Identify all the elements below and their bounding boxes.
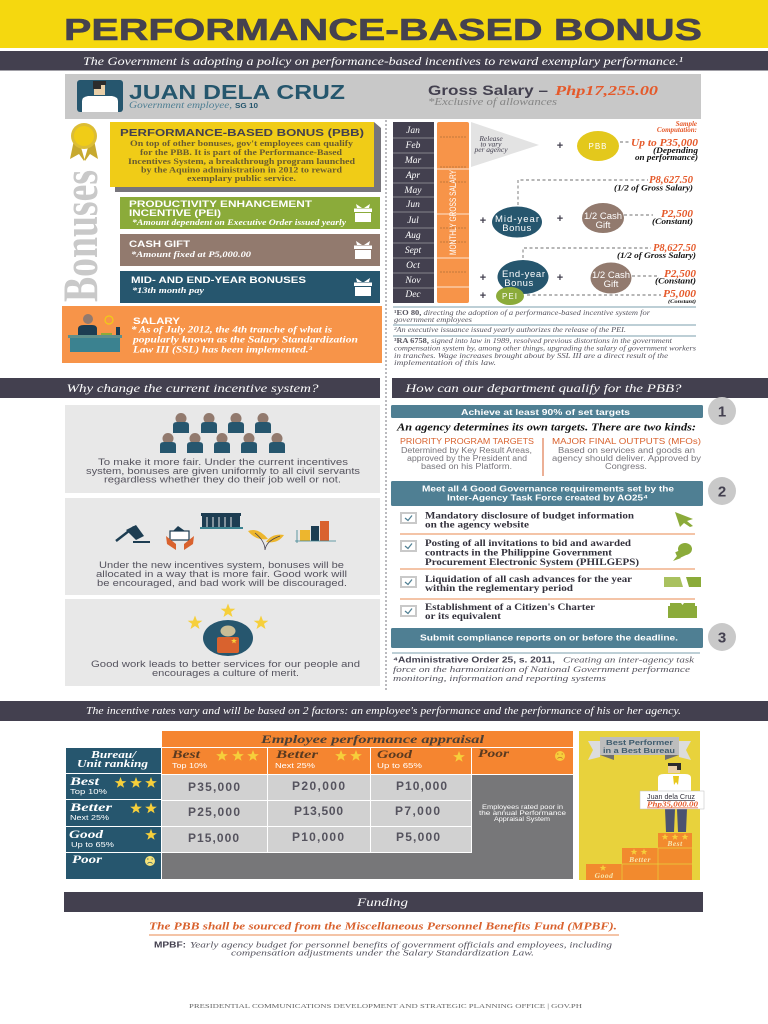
step 3 bar [391,628,703,648]
vertical heading: Bonuses: Bonuses [52,170,108,302]
icon: hands holding ballot [166,526,194,550]
panel: good work: Good work leads to better services for our people and [91,659,360,669]
month column: Jan [406,126,420,136]
ribbon banner: in a Best Bureau [603,746,676,755]
panel: uniform bonuses: regardless whether they do their job well or not. [104,474,341,484]
end-year bonus circle: Bonus [504,278,534,289]
month column: May [404,186,422,196]
major final outputs [552,436,701,471]
icon: gift [354,204,372,222]
sample computation amounts: Sample [676,120,697,128]
step number 1: 1 [718,404,726,420]
icon: group of employees [160,413,285,453]
footnotes: laws and issuances: ¹EO 80, directing the adoption of a performance-based incentive system for [394,309,650,317]
MPBF definition: compensation adjustments under the Salary Standardization Law. [231,948,534,958]
row headers: Better [69,800,112,814]
panel body text: Incentives System, a breakthrough program launched [128,156,355,166]
row headers: Poor [72,852,102,866]
sample computation amounts: Up to P35,000 [631,137,699,149]
major final outputs: MAJOR FINAL OUTPUTS (MFOs) [552,436,701,446]
figure: employee on podium [658,763,691,832]
release triangle: per agency [473,145,508,154]
plus signs: + [557,213,563,225]
step 1 bar [391,405,703,418]
gross salary label: Gross Salary – [428,83,549,98]
amount cells: P35,000 [188,780,240,794]
month column: Dec [404,290,421,300]
amount cells: P15,000 [188,831,239,845]
table heading: Employee performance appraisal [260,732,485,746]
mid-year bonus circle [492,206,542,238]
checklist: citizen's charter: or its equivalent [425,611,501,621]
plus signs: + [557,140,563,152]
checklist: PhilGEPS posting: Procurement Electronic System (PHILGEPS) [425,557,639,567]
month column: Jul [407,216,419,226]
checklist: cash advances [400,574,701,593]
sample computation amounts: (Depending [653,145,699,155]
section bar: incentive rates [0,701,768,721]
panel body text [128,138,355,183]
icon: sad face [555,751,565,761]
icon: gift [354,278,372,296]
section bar: why change [0,378,380,398]
column header: good: Good [377,747,413,761]
footnote: administrative order [392,653,700,683]
section bar: funding: Funding [356,897,408,909]
panel body text: by the Aquino administration in 2012 to reward [141,164,342,174]
mid-year cash gift circle [582,203,624,233]
amount cells [162,775,471,852]
row headers: Bureau/ [90,750,137,761]
mid-year cash gift circle: 1/2 Cash [584,211,622,222]
row headers: Next 25% [70,813,109,822]
plus signs: + [480,272,486,284]
podium steps: Good [595,871,613,880]
plus signs: + [480,215,486,227]
plus signs [480,140,563,302]
month column: Jun [406,200,420,210]
row headers [66,748,161,879]
checklist: budget disclosure [400,510,693,530]
panel: mid- and end-year bonuses [120,271,380,303]
icon: bar chart [295,521,336,543]
row headers: Unit ranking [77,759,148,770]
icon: stars and merit badge [188,604,268,656]
podium steps: Best [666,839,683,848]
month column [393,122,434,303]
panel: salary: * As of July 2012, the 4th tranche of what is [131,324,333,334]
name tag: Php35,000.00 [647,800,699,808]
step 2 bar [391,481,703,506]
checklist: PhilGEPS posting [400,538,692,567]
amount cells: P7,000 [395,804,440,818]
section bar: how to qualify: How can our department qualify for the PBB? [404,381,682,395]
column header: good: Up to 65% [377,761,422,770]
title banner: PERFORMANCE-BASED BONUS [64,12,702,47]
column header: better: Next 25% [275,761,315,770]
column header: better: Better [275,747,318,761]
footnotes: laws and issuances: ²An executive issuance issued yearly authorizes the release of the PEI. [394,326,626,334]
panel: productivity enhancement incentive: PRODUCTIVITY ENHANCEMENT [129,199,312,210]
section bar: why change: Why change the current incentive system? [66,381,318,395]
end-year bonus circle: End-year [502,269,545,280]
icon: cash stacks [664,577,701,587]
priority program targets: approved by the President and [407,454,527,463]
month column: Nov [404,276,421,286]
sample computation amounts: (Constant) [652,216,693,226]
poor rating cells: Employees rated poor in [482,804,563,811]
sample computation amounts: on performance) [635,152,698,162]
employee role: Government employee, [129,101,232,111]
title banner [0,0,768,48]
panel: salary [62,306,382,363]
end-year cash gift circle [590,262,632,294]
panel: productivity enhancement incentive: *Amount dependent on Executive Order issued yearly [132,217,346,227]
ribbon banner [588,737,691,760]
panel: salary: popularly known as the Salary Standardization [132,334,358,344]
mid-year cash gift circle: Gift [596,220,611,231]
footnote: administrative order: ⁴Administrative Order 25, s. 2011, [393,656,555,664]
footnotes: laws and issuances: government employees [394,316,472,324]
panel heading: PERFORMANCE-BASED BONUS (PBB) [120,127,364,139]
column header: best [162,747,267,774]
sample computation amounts: P2,500 [664,268,696,280]
footnotes: laws and issuances [393,307,696,367]
icon: gift [354,241,372,259]
panel: new incentives system: Under the new incentives system, bonuses will be [99,560,344,570]
panel: cash gift: CASH GIFT [129,239,190,250]
plus signs: + [557,272,563,284]
column header: poor: Poor [478,746,509,760]
step 3 bar: Submit compliance reports on or before the deadline. [420,632,678,642]
icon: employee at desk [68,314,122,352]
month column: Aug [404,231,421,241]
PBB circle: PBB [588,142,608,151]
mid-year bonus circle: Bonus [502,223,532,234]
section bar: funding [64,892,703,912]
priority program targets: Determined by Key Result Areas, [401,446,532,455]
sample computation amounts [614,120,699,305]
checklist: citizen's charter: Establishment of a Citizen's Charter [425,602,595,612]
column header: best: Top 10% [172,761,207,770]
podium steps: Better [628,855,651,864]
major final outputs: Congress. [605,462,647,471]
row headers: Top 10% [70,787,107,796]
amount cells: P13,500 [294,804,343,818]
sample computation amounts: P8,627.50 [653,242,696,254]
column header: best: Best [171,747,201,761]
section bar: how to qualify [392,378,768,398]
PEI circle [496,287,524,305]
icon: government building [200,513,243,529]
PBB circle [577,131,619,161]
sample computation amounts: P2,500 [661,208,693,220]
panel: uniform bonuses: system, bonuses are given uniformly to all civil servants [86,466,361,476]
employee profile header [65,74,701,119]
amount cells: P25,000 [188,805,240,819]
row headers: Good [69,827,104,841]
checklist: citizen's charter [400,602,697,621]
icon: cursor [675,512,693,527]
checklist: cash advances: within the reglementary period [425,583,573,593]
panel body text: On top of other bonuses, gov't employees can qualify [130,138,354,148]
icon: sad face [145,856,155,866]
section bar: incentive rates: The incentive rates vary and will be based on 2 factors: an employee's performance and the performance of his or her agency. [86,706,681,717]
mid-year bonus circle: Mid-year [495,214,539,225]
amount cells: P10,000 [396,779,447,793]
panel: new incentives system [65,498,380,595]
column header: good [371,747,471,774]
funding statement: The PBB shall be sourced from the Miscellaneous Personnel Benefits Fund (MPBF). [149,922,617,932]
poor rating cells [162,775,573,879]
footnote: administrative order: force on the harmonization of National Government performance [393,665,691,674]
panel: productivity enhancement incentive [120,197,380,229]
panel: new incentives system: be encouraged, and bad work will be discouraged. [97,578,347,588]
dashed connectors [518,142,661,295]
MPBF definition: MPBF: [154,940,186,950]
step number 3 [708,623,736,651]
name tag: Juan dela Cruz [647,794,695,801]
icon: pushpin [673,543,692,561]
footnotes: laws and issuances: in tranches. Wage increases brought about by SSL III are a direct result of the [394,352,668,360]
ribbon banner: Best Performer [606,738,673,747]
major final outputs: agency should deliver. Approved by [552,454,701,463]
priority program targets: PRIORITY PROGRAM TARGETS [400,436,534,446]
monthly gross salary column [437,122,469,303]
poor rating cells: the annual Performance [479,810,566,817]
priority program targets: based on his Platform. [421,462,512,471]
sample computation amounts: Computation: [657,126,697,134]
footnotes: laws and issuances: implementation of this law. [394,359,496,367]
panel: good work: encourages a culture of merit. [152,668,299,678]
step number 3: 3 [718,630,726,646]
icon: medal [70,123,98,161]
employee name: JUAN DELA CRUZ [129,82,345,104]
row headers: Up to 65% [71,840,114,849]
panel body text: for the PBB. It is part of the Performance-Based [140,147,342,157]
sample computation amounts: (Constant) [655,276,696,286]
step number 2: 2 [718,484,726,500]
panel: salary: SALARY [133,316,181,327]
panel: performance-based bonus [110,122,381,192]
incentive rates table [66,731,573,879]
panel: cash gift: *Amount fixed at P5,000.00 [131,249,252,259]
PEI circle: PEI [502,292,518,301]
major final outputs: Based on services and goods an [558,446,695,455]
sample computation amounts: (Constant) [668,298,696,305]
month column: Feb [405,141,421,151]
release triangle: Release [478,134,503,143]
end-year bonus circle [498,260,548,294]
MPBF definition: Yearly agency budget for personnel benefits of government officials and employees, including [190,940,612,950]
amount cells: P10,000 [292,830,344,844]
panel body text: exemplary public service. [187,173,296,183]
icon: open book [668,603,697,618]
panel: new incentives system: allocated in a way that is more fair. Good work will [96,569,347,579]
monthly gross salary column: MONTHLY GROSS SALARY [448,170,458,255]
step 2 bar: Meet all 4 Good Governance requirements set by the [422,484,674,494]
step 1 bar: Achieve at least 90% of set targets [461,407,630,417]
column header: better [268,747,370,774]
checklist: budget disclosure: on the agency website [425,520,529,530]
panel: productivity enhancement incentive: INCENTIVE (PEI) [129,208,221,219]
column header: poor [472,746,573,774]
checklist: PhilGEPS posting: contracts in the Philippine Government [425,548,612,558]
footnotes: laws and issuances: ³RA 6758, signed into law in 1989, resolved previous distortions in the government [394,337,673,345]
step 2 bar: Inter-Agency Task Force created by AO25⁴ [447,492,648,502]
sample computation amounts: P5,000 [663,288,697,300]
end-year cash gift circle: Gift [604,279,619,290]
gross salary amount: Php17,255.00 [555,84,658,99]
icon: employee portrait [77,80,123,112]
panel: best performer illustration [579,731,704,880]
table heading [162,731,573,747]
footnotes: laws and issuances: compensation system by, among other things, upgrading the salary of government workers [394,344,696,352]
panel: good work [65,599,380,686]
row headers: Best [69,774,100,788]
panel: uniform bonuses: To make it more fair. Under the current incentives [98,457,349,467]
amount cells: P20,000 [292,779,345,793]
allowances note: *Exclusive of allowances [428,97,557,108]
sample computation amounts: P8,627.50 [649,174,693,186]
footnote: administrative order: Creating an inter-agency task [563,656,695,664]
icon: sprout [248,530,284,550]
checklist: budget disclosure: Mandatory disclosure of budget information [425,510,634,520]
panel: cash gift [120,234,380,266]
panel: mid- and end-year bonuses: *13th month pay [132,285,204,295]
release triangle [471,122,539,167]
plus signs: + [480,290,486,302]
step number 2 [708,477,736,505]
month column: Sept [405,246,422,256]
step number 1 [708,397,736,425]
month column: Apr [405,171,420,181]
salary grade: SG 10 [235,101,258,110]
sample computation amounts: (1/2 of Gross Salary) [614,182,693,192]
name tag [640,791,704,809]
end-year cash gift circle: 1/2 Cash [592,270,630,281]
priority program targets [400,436,534,471]
checklist: cash advances: Liquidation of all cash advances for the year [425,574,632,584]
panel: salary: Law III (SSL) has been implemented.³ [132,344,312,354]
intro statement bar: The Government is adopting a policy on performance-based incentives to reward exemplary performance.¹ [83,56,684,68]
sample computation amounts: (1/2 of Gross Salary) [617,250,696,260]
checklist: PhilGEPS posting: Posting of all invitations to bid and awarded [425,538,631,548]
MPBF definition [154,940,612,958]
panel: uniform bonuses [65,405,380,493]
footer credit: PRESIDENTIAL COMMUNICATIONS DEVELOPMENT AND STRATEGIC PLANNING OFFICE | GOV.PH [189,1003,582,1010]
poor rating cells: Appraisal System [494,816,550,823]
podium steps [586,833,692,880]
month column: Mar [404,156,421,166]
icon: gavel [116,525,150,543]
panel: mid- and end-year bonuses: MID- AND END-YEAR BONUSES [131,275,306,286]
release triangle: to vary [480,140,502,148]
intro statement bar [0,51,768,70]
month column: Oct [406,261,420,271]
amount cells: P5,000 [396,830,440,844]
targets intro: An agency determines its own targets. There are two kinds: [396,422,696,434]
footnote: administrative order: monitoring, information and reporting systems [393,674,606,683]
